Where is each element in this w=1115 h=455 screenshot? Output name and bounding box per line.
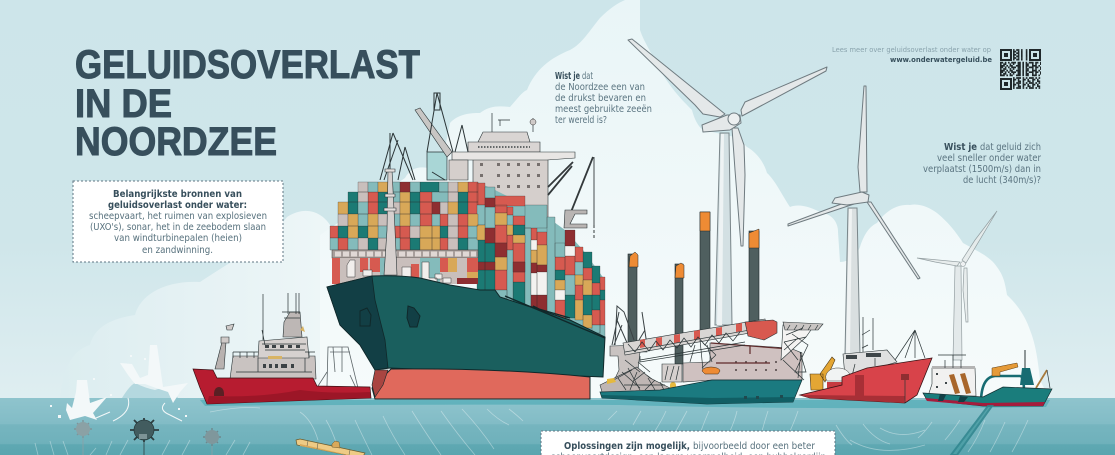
anchors xyxy=(360,306,420,327)
fact: speed of sound xyxy=(923,142,1041,186)
clouds xyxy=(60,0,1050,400)
panel: main noise sources: van windturbinepalen (heien) xyxy=(114,233,242,244)
sea xyxy=(0,398,1115,455)
website reference: Lees meer over geluidsoverlast onder water op xyxy=(832,46,992,54)
fact: busiest seas: dat xyxy=(582,71,593,82)
wind turbine 2 xyxy=(788,86,920,355)
fact: speed of sound: de lucht (340m/s)? xyxy=(963,175,1041,186)
fact: busiest seas: Wist je xyxy=(555,71,580,82)
fact: busiest seas xyxy=(555,71,652,126)
fore deck truss xyxy=(600,367,670,392)
QR code xyxy=(1000,49,1041,90)
net frame xyxy=(318,347,358,388)
panel: main noise sources: en zandwinning. xyxy=(142,245,213,256)
main deck truss xyxy=(623,319,767,355)
fact: busiest seas: de Noordzee een van xyxy=(555,82,645,93)
ship: container ship xyxy=(327,93,605,399)
fact: speed of sound: dat geluid zich xyxy=(980,142,1041,153)
sea mine centre xyxy=(130,418,159,455)
hull xyxy=(327,276,605,377)
fact: busiest seas: meest gebruikte zeeën xyxy=(555,104,652,115)
fact: busiest seas: de drukst bevaren en xyxy=(555,93,646,104)
accommodation xyxy=(683,343,802,382)
panel: solutions: Oplossingen zijn mogelijk, xyxy=(564,441,690,452)
seabed pipe xyxy=(951,406,992,455)
ship: teal dredger xyxy=(923,350,1052,455)
sea ripples xyxy=(35,408,1028,455)
wind turbine 1 xyxy=(628,39,827,325)
water splash xyxy=(50,345,188,421)
sea mine left xyxy=(74,420,92,455)
orange crane xyxy=(992,363,1018,376)
red keel xyxy=(372,369,590,399)
ship: red survey vessel xyxy=(193,293,371,404)
title: IN DE xyxy=(75,82,172,126)
title: NOORDZEE xyxy=(75,120,277,164)
hull xyxy=(600,380,802,404)
container back fill xyxy=(477,182,605,340)
dark bow xyxy=(327,276,388,370)
hull xyxy=(923,387,1052,406)
panel: solutions xyxy=(541,431,835,455)
fact: speed of sound: Wist je xyxy=(944,142,977,153)
dredge pipe xyxy=(981,376,1024,400)
website reference: www.onderwatergeluid.be xyxy=(890,56,992,64)
bow truss xyxy=(781,325,813,360)
mast and rigging xyxy=(862,317,925,360)
superstructure xyxy=(843,350,897,377)
fact: speed of sound: veel sneller onder water xyxy=(937,153,1041,164)
forward mast xyxy=(384,169,397,275)
panel: main noise sources: (UXO's), sonar, het in de zeebodem slaan xyxy=(90,222,266,233)
title xyxy=(75,43,420,164)
panel: solutions: bijvoorbeeld door een beter xyxy=(693,441,815,452)
ship shadow band xyxy=(200,400,1050,408)
superstructure xyxy=(230,356,316,379)
hull xyxy=(800,358,932,403)
legs xyxy=(628,212,759,364)
yellow crane xyxy=(810,357,835,390)
bridge and crane structures xyxy=(380,93,594,238)
containers: front stack and side stack xyxy=(330,182,605,337)
wind turbine 3 xyxy=(917,211,997,360)
submarine xyxy=(296,439,365,455)
fact: busiest seas: ter wereld is? xyxy=(555,115,607,126)
lifeboat xyxy=(702,367,720,374)
wheelhouse xyxy=(928,368,976,396)
website reference xyxy=(832,46,992,64)
fact: speed of sound: verplaatst (1500m/s) dan in xyxy=(923,164,1041,175)
hull xyxy=(193,369,371,404)
ship: red tug with crane xyxy=(800,317,932,403)
sea mine right xyxy=(203,428,221,455)
fore mast xyxy=(215,342,226,369)
ship: jack-up installation vessel xyxy=(600,212,823,404)
panel: main noise sources: geluidsoverlast onder water: xyxy=(108,200,247,211)
aft crane frame xyxy=(612,306,647,345)
panel: main noise sources: scheepvaart, het ruimen van explosieven xyxy=(89,211,267,222)
deck band xyxy=(332,250,478,284)
panel: main noise sources xyxy=(73,181,283,262)
title: GELUIDSOVERLAST xyxy=(75,43,420,87)
panel: main noise sources: Belangrijkste bronnen van xyxy=(113,189,242,200)
